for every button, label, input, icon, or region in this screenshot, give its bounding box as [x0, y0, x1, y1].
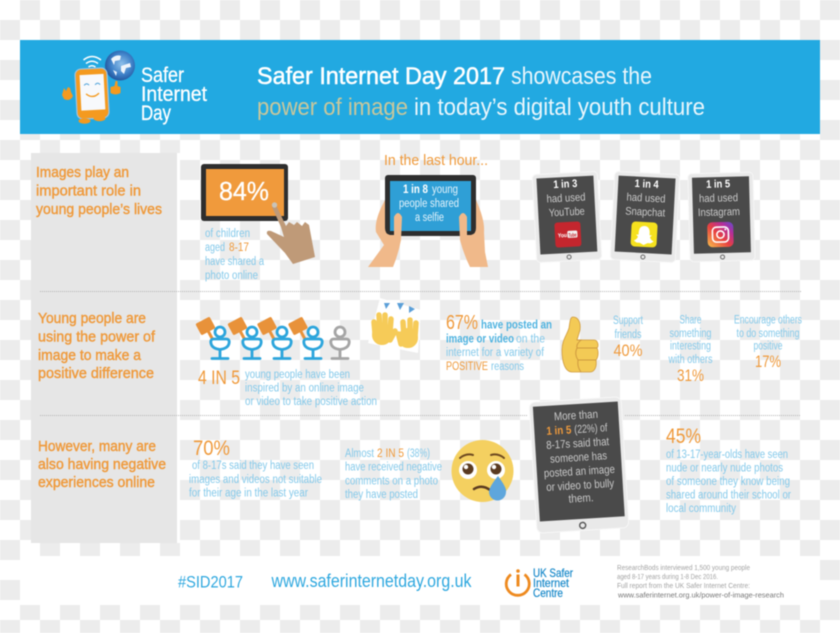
stat: share something 31%	[668, 314, 713, 385]
phone: Snapchat	[610, 171, 680, 263]
stat: encourage others 17%: Encourage others	[734, 314, 802, 326]
text: of children aged 8-17: aged	[205, 242, 225, 254]
pictogram: 4 in 5 people with signs	[196, 317, 349, 358]
title: showcases the	[511, 63, 652, 90]
title: power of image	[257, 94, 408, 121]
icon: right hand	[459, 200, 488, 267]
text: young people inspired: or video to take positive action	[245, 396, 377, 408]
stat: 67% posted: internet for a variety of	[446, 347, 545, 359]
stat: 67% posted: reasons	[491, 361, 524, 373]
stat: almost 2 in 5: comments on a photo	[345, 476, 438, 488]
heading: negative experiences: also having negative	[38, 456, 166, 473]
stat: support friends 40%: 40%	[614, 341, 642, 360]
stat: support friends 40%: Support	[613, 315, 644, 327]
phone: YouTube: had used	[546, 192, 586, 206]
callout tablet: 1 in 5 bullying: (22%) of	[574, 422, 608, 436]
header banner	[20, 40, 820, 134]
stat: 1 in 8 tablet with hands	[368, 175, 488, 267]
text: in the last hour: In the last hour...	[384, 152, 488, 169]
research note: ResearchBods interviewed 1,500 young people	[617, 565, 750, 572]
stat: 45%: shared around their school or	[666, 490, 791, 502]
phone: Snapchat: Snapchat	[625, 205, 666, 220]
heading: negative experiences: However, many are	[38, 438, 156, 455]
stat: 45%: of 13-17-year-olds have seen	[666, 449, 788, 461]
callout tablet: 1 in 5 bullying: posted an image	[544, 464, 615, 480]
stat: support friends 40%	[613, 315, 644, 360]
callout tablet: 1 in 5 bullying: or video to bully	[546, 478, 615, 494]
stat: 45%: 45%	[666, 425, 701, 448]
stat: 84% tablet: 84%	[219, 176, 269, 206]
text: of children aged 8-17	[205, 228, 264, 282]
icon: thumbs up	[562, 317, 598, 372]
icon: Snapchat	[630, 221, 658, 248]
icon: pointing hand	[267, 202, 315, 264]
text: of children aged 8-17: 8-17	[229, 242, 249, 254]
stat: encourage others 17%	[734, 314, 802, 371]
stat: share something 31%: 31%	[677, 366, 704, 385]
logo: UK Safer Internet Centre	[506, 566, 573, 600]
stat: 1 in 8 tablet with hands: a selfie	[415, 212, 444, 224]
heading: images play an important role: important role in	[36, 182, 141, 200]
stat: 70%: of 8-17s said they have seen	[192, 460, 314, 472]
icon: YouTube: You	[558, 233, 567, 239]
research note: aged 8-17 years during 1-8 Dec 2016.	[617, 574, 718, 581]
stat: 67% posted: have posted an	[481, 320, 552, 332]
stat: 1 in 8 tablet with hands: young	[432, 184, 458, 196]
stat: share something 31%: interesting	[670, 340, 711, 352]
stat: 45%: local community	[666, 503, 736, 515]
stat: share something 31%: something	[670, 328, 712, 340]
stat: 67% posted: 67%	[446, 312, 478, 334]
stat: 67% posted	[446, 312, 552, 373]
stat: 70%: 70%	[193, 437, 230, 460]
stat: 70%	[189, 437, 322, 500]
phone: Instagram	[688, 172, 755, 262]
stat: 67% posted: POSITIVE	[446, 361, 488, 373]
heading: images play an important role: young people’s lives	[36, 201, 162, 218]
phone: Instagram: had used	[699, 192, 738, 205]
title	[257, 63, 705, 121]
text: of children aged 8-17: of children	[205, 228, 250, 240]
phone: YouTube	[532, 171, 602, 263]
logo wordmark	[141, 64, 207, 125]
stat: almost 2 in 5: Almost	[345, 448, 375, 460]
heading: using the power of image: positive difference	[38, 365, 154, 382]
title: Safer Internet Day 2017	[257, 63, 505, 90]
research note	[617, 565, 784, 600]
logo wordmark: Internet	[141, 83, 207, 106]
stat: encourage others 17%: to do something	[736, 328, 800, 340]
text: of children aged 8-17: photo online	[205, 270, 258, 282]
research note: Full report from the UK Safer Internet Centre:	[617, 583, 750, 590]
stat: 1 in 8 tablet with hands: people shared	[399, 198, 459, 210]
heading: using the power of image: using the power of	[38, 328, 156, 346]
heading: negative experiences	[38, 438, 166, 491]
stat: encourage others 17%: positive	[754, 340, 782, 352]
heading: using the power of image: image to make a	[38, 347, 142, 364]
phone: Instagram: Instagram	[698, 206, 740, 219]
research note: www.saferinternet.org.uk/power-of-image-research	[617, 592, 784, 600]
icon: crying emoji	[452, 440, 514, 502]
heading: using the power of image: Young people are	[38, 310, 146, 327]
stat: almost 2 in 5: (38%)	[407, 448, 430, 460]
callout tablet: 1 in 5 bullying: More than	[554, 409, 598, 423]
heading: images play an important role	[36, 164, 162, 218]
stat: 4 in 5: 4 IN 5	[198, 368, 240, 389]
logo wordmark: Day	[141, 102, 171, 125]
heading: using the power of image	[38, 310, 156, 382]
title: in today’s digital youth culture	[414, 94, 705, 121]
stat: almost 2 in 5	[345, 448, 442, 501]
text: young people inspired: inspired by an online image	[245, 382, 364, 394]
phone: YouTube: YouTube	[548, 206, 585, 219]
stat: 67% posted: on the	[516, 334, 545, 346]
row dividers	[40, 292, 801, 416]
icon: Instagram	[707, 222, 734, 247]
heading: images play an important role: Images play an	[36, 164, 129, 181]
logo: UK Safer Internet Centre: Centre	[533, 586, 563, 600]
mascot logo	[62, 50, 135, 124]
phone: YouTube: 1 in 3	[553, 178, 578, 191]
website url: www.saferinternetday.org.uk	[271, 571, 472, 591]
icon: raised hands	[368, 298, 421, 353]
stat: 45%: of someone they know being	[666, 476, 790, 488]
phone: Snapchat: had used	[626, 192, 666, 206]
callout tablet: 1 in 5 bullying: 1 in 5	[546, 424, 572, 438]
text: young people inspired	[245, 369, 377, 408]
footer band	[20, 556, 820, 605]
logo: UK Safer Internet Centre: Internet	[533, 576, 570, 590]
phone: Instagram: 1 in 5	[706, 178, 730, 191]
logo wordmark: Safer	[141, 64, 184, 87]
phone: Snapchat: 1 in 4	[634, 178, 660, 191]
stat: encourage others 17%: 17%	[755, 352, 781, 371]
stat: share something 31%: with others	[668, 354, 713, 366]
icon: YouTube: Tube	[568, 233, 577, 239]
stat: almost 2 in 5: 2 IN 5	[377, 448, 404, 460]
icon: left hand	[368, 200, 402, 267]
hashtag: #SID2017	[178, 572, 243, 592]
stat: 45%	[666, 425, 791, 515]
stat: 84% tablet	[201, 164, 315, 264]
callout tablet: 1 in 5 bullying: 8-17s said that	[546, 436, 610, 452]
stat: 1 in 8 tablet with hands: 1 in 8	[403, 184, 429, 196]
stat: 70%: for their age in the last year	[189, 488, 308, 500]
stat: 70%: images and videos not suitable	[189, 474, 322, 486]
text: young people inspired: young people have been	[245, 369, 350, 381]
heading: negative experiences: experiences online	[38, 474, 155, 491]
callout tablet: 1 in 5 bullying	[529, 397, 629, 533]
stat: support friends 40%: friends	[614, 329, 642, 341]
text: of children aged 8-17: have shared a	[205, 256, 264, 268]
left grey column	[31, 153, 180, 543]
stat: 67% posted: image or video	[446, 334, 514, 346]
logo: UK Safer Internet Centre: UK Safer	[533, 566, 573, 580]
callout tablet: 1 in 5 bullying: them.	[568, 492, 594, 506]
icon: YouTube	[554, 221, 582, 248]
callout tablet: 1 in 5 bullying: someone has	[550, 450, 608, 466]
stat: share something 31%: Share	[680, 314, 702, 326]
stat: almost 2 in 5: have received negative	[345, 462, 442, 474]
stat: almost 2 in 5: they have posted	[345, 489, 418, 501]
stat: 45%: nude or nearly nude photos	[666, 462, 783, 474]
